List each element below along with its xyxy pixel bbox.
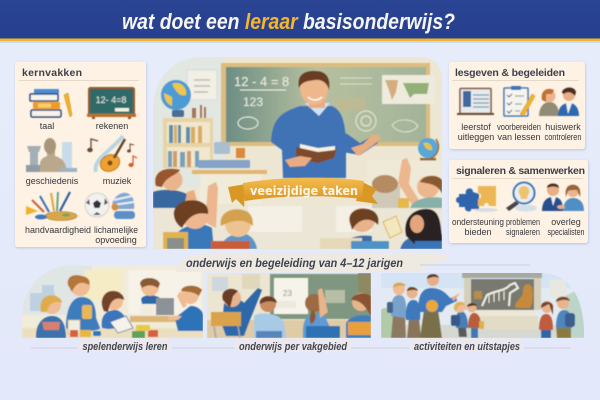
panel: kernvakken	[15, 62, 146, 247]
heading: kernvakken: kernvakken	[22, 67, 82, 79]
icon: handvaardigheid brushes and palette	[26, 192, 77, 220]
museum display	[462, 272, 542, 329]
panel: spelenderwijs leren	[22, 265, 203, 338]
label: lichamelijke opvoeding: lichamelijke	[94, 225, 138, 235]
label: problemen signaleren: problemen	[506, 217, 540, 227]
label: voorbereiden van lessen: van lessen	[497, 132, 541, 142]
icon: geschiedenis	[26, 138, 77, 172]
label: ondersteuning bieden: ondersteuning	[452, 217, 504, 227]
label: huiswerk controleren	[544, 122, 582, 142]
icon: taal books	[30, 89, 72, 117]
panel: onderwijs per vakgebied: 23	[283, 289, 292, 298]
label: ondersteuning bieden: bieden	[464, 227, 492, 237]
header banner	[0, 0, 600, 43]
label: lichamelijke opvoeding	[94, 225, 138, 245]
pupils	[211, 288, 371, 338]
label: overleg specialisten: specialisten	[548, 227, 584, 237]
small globe	[418, 138, 438, 160]
caption: activiteiten en uitstapjes	[351, 338, 571, 353]
label: huiswerk controleren: controleren	[544, 132, 582, 142]
label: overleg specialisten	[548, 217, 584, 237]
children	[153, 158, 442, 249]
pupils in museum	[387, 282, 575, 338]
panel: onderwijs per vakgebied	[207, 273, 371, 338]
wall map	[382, 75, 435, 104]
globe	[161, 80, 191, 117]
teacher	[271, 71, 381, 178]
caption: onderwijs per vakgebied: onderwijs per vakgebied	[239, 341, 347, 353]
label: muziek: muziek	[103, 176, 132, 186]
section heading band	[176, 254, 530, 272]
icon: muziek guitar	[87, 136, 137, 174]
chalkboard	[221, 63, 430, 146]
label: leerstof uitleggen	[458, 122, 494, 142]
bookshelf	[163, 105, 213, 168]
label: huiswerk controleren: huiswerk	[545, 122, 581, 132]
icon: rekenen chalkboard: 12- 4=8	[96, 95, 126, 105]
label: voorbereiden van lessen	[497, 122, 541, 142]
icon: rekenen chalkboard	[87, 88, 136, 119]
icon: ondersteuning puzzle	[456, 186, 498, 212]
teacher guide	[419, 274, 460, 338]
label: leerstof uitleggen: leerstof	[461, 122, 491, 132]
chalkboard: 123	[243, 95, 263, 109]
teacher desk	[192, 142, 442, 204]
label: problemen signaleren	[506, 217, 540, 237]
chalkboard: 12 - 4 = 8	[234, 74, 289, 89]
caption: spelenderwijs leren: spelenderwijs leren	[82, 341, 168, 353]
label: geschiedenis: geschiedenis	[26, 176, 79, 186]
lower classroom strip	[153, 205, 442, 249]
icon: huiswerk two people	[539, 88, 579, 116]
label: problemen signaleren: signaleren	[506, 227, 540, 237]
kids playing	[36, 275, 203, 338]
icon: overleg specialisten	[542, 184, 584, 211]
label: ondersteuning bieden	[452, 217, 504, 237]
panel: lesgeven en begeleiden	[449, 62, 585, 149]
caption: onderwijs per vakgebied	[172, 338, 353, 353]
heading: signaleren en samenwerken: signaleren & samenwerken	[456, 165, 585, 177]
label: rekenen: rekenen	[96, 121, 128, 131]
panel: central classroom illustration	[153, 57, 442, 249]
heading: lesgeven en begeleiden: lesgeven & begeleiden	[455, 67, 565, 79]
icon: leerstof uitleggen screen	[457, 88, 494, 115]
heading: onderwijs en begeleiding: onderwijs en begeleiding van 4–12 jarigen	[186, 256, 403, 270]
title: wat doet een leraar basisonderwijs?	[122, 9, 455, 34]
icon: lichamelijke opvoeding ball and helmet	[85, 193, 135, 219]
label: voorbereiden van lessen: voorbereiden	[497, 122, 541, 132]
panel: activiteiten en uitstapjes	[381, 270, 585, 338]
label: lichamelijke opvoeding: opvoeding	[95, 235, 137, 245]
panel: signaleren en samenwerken	[449, 160, 588, 243]
label: taal: taal	[40, 121, 54, 131]
label: leerstof uitleggen: uitleggen	[458, 132, 494, 142]
wall paper	[187, 70, 217, 100]
caption: activiteiten en uitstapjes: activiteiten en uitstapjes	[414, 341, 520, 353]
caption: spelenderwijs leren	[31, 338, 172, 353]
label: overleg specialisten: overleg	[551, 217, 581, 227]
icon: voorbereiden checklist	[504, 86, 535, 116]
banner: veelzijdige taken: veeizijdige taken	[250, 183, 358, 198]
icon: problemen magnifier	[506, 182, 537, 212]
label: handvaardigheid: handvaardigheid	[25, 225, 91, 235]
banner: veelzijdige taken	[228, 178, 378, 207]
